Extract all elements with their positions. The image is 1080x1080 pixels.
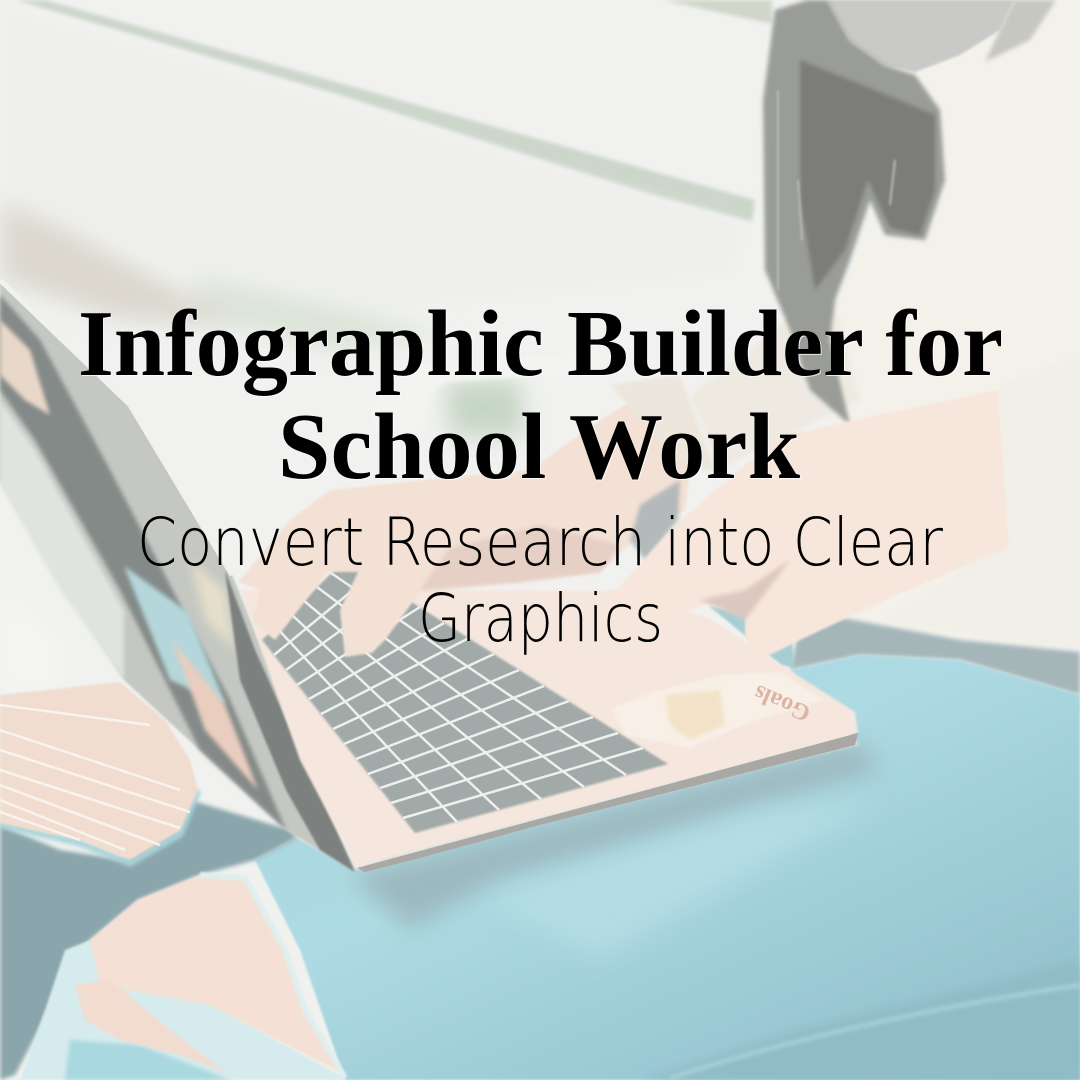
title [78,292,1003,499]
knee skin with threads [0,682,198,863]
background: white curved handle [370,352,600,430]
keyboard [262,560,668,833]
title: School Work [278,395,801,499]
dark waistband below sweater [790,618,1080,695]
jeans shading [350,742,1080,1080]
laptop lid [0,278,355,872]
jeans right leg [255,655,1080,1080]
knee skin lower [90,875,345,1075]
stickers: Goals [750,679,814,726]
subtitle: Convert Research into Clear [137,504,944,581]
frayed pale denim [20,940,345,1080]
sweater [690,0,1080,650]
stickers [612,672,823,748]
laptop base [240,590,858,868]
dark jeans left leg [0,800,297,1080]
laptop front edge [357,733,858,872]
title: Infographic Builder for [78,292,1003,396]
subtitle [137,504,944,657]
subtitle: Graphics [418,580,663,657]
right hand [590,390,1009,660]
teal gap behind laptop [709,606,795,668]
hair [763,0,945,425]
hat [828,0,1014,72]
background: ground behind bench [0,200,525,690]
background: bench slats [0,0,772,320]
left hand [238,375,715,657]
